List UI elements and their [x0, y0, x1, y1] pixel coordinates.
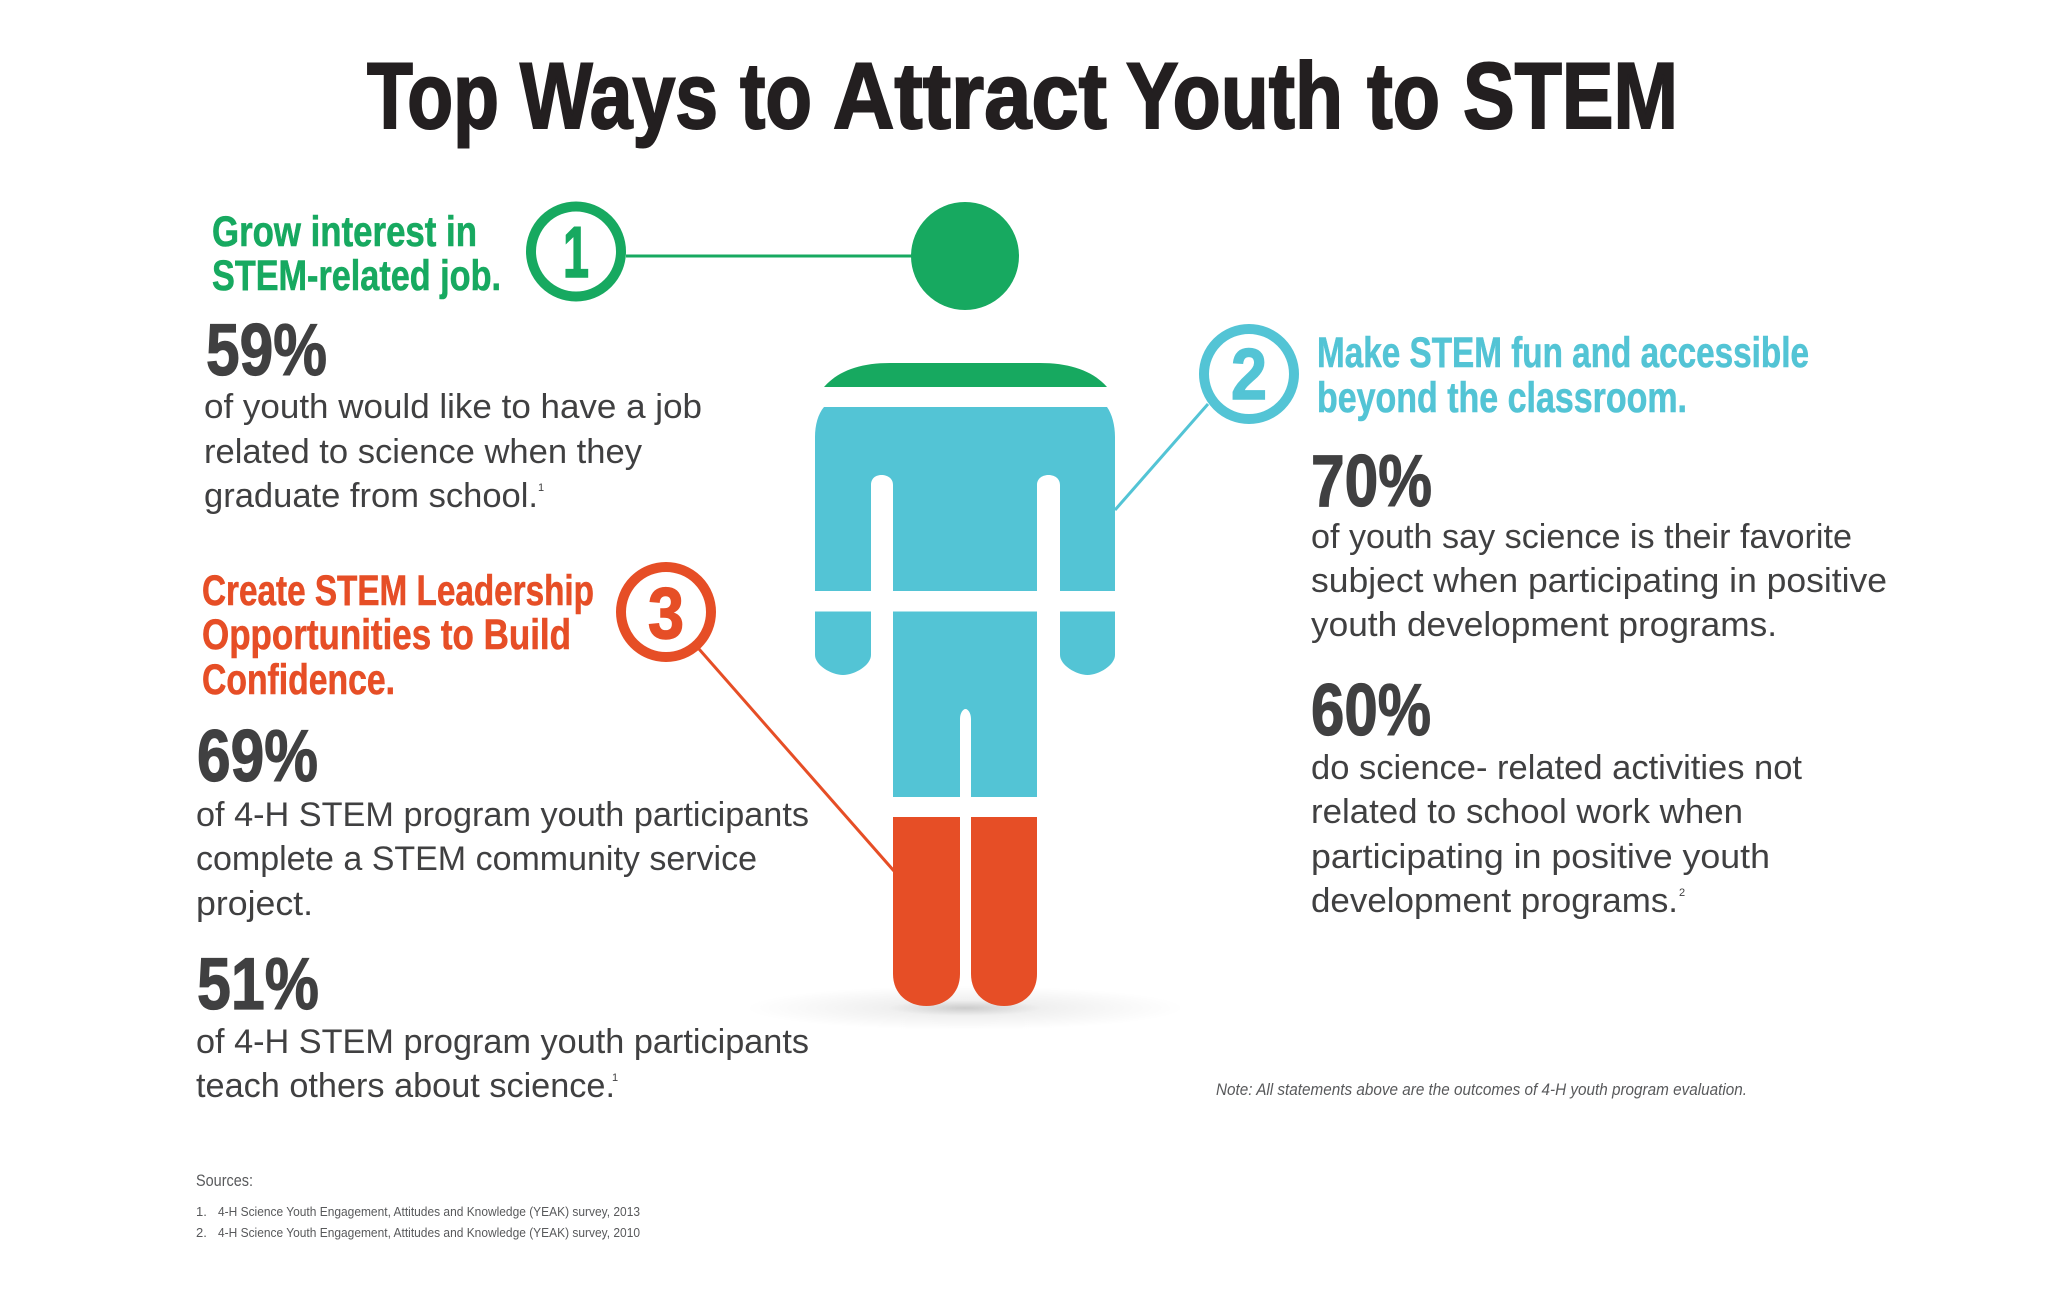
heading: make STEM fun: Make STEM fun and accessible [1317, 329, 1809, 377]
text: 60% description: 2 [1679, 887, 1685, 899]
stat: 69%: 69% [197, 716, 318, 797]
sources: 2. [196, 1225, 207, 1240]
text: 69% description: project. [196, 885, 313, 923]
heading: create leadership: Confidence. [202, 656, 395, 704]
text: 60% description [1311, 749, 1802, 920]
text: 59% description [204, 388, 702, 515]
text: 51% description [196, 1023, 809, 1105]
text: 60% description: related to school work when [1311, 793, 1743, 831]
connector 2 [1115, 404, 1208, 510]
text: 70% description [1311, 518, 1887, 644]
sources: 1. [196, 1204, 207, 1219]
sources: Sources: [196, 1171, 253, 1190]
title: Attract [833, 43, 1107, 148]
title: to [1367, 43, 1440, 148]
title: Ways [520, 43, 718, 148]
heading: create leadership: Create STEM Leadership [202, 567, 594, 615]
text: 59% description: graduate from school. [204, 477, 538, 515]
heading: make STEM fun [1317, 329, 1809, 422]
text: 51% description: 1 [612, 1072, 618, 1084]
stat: 59%: 59% [206, 310, 327, 391]
evaluation note: Note: All statements above are the outcomes of 4-H youth program evaluation. [1216, 1080, 1747, 1099]
figure hips [893, 612, 1037, 797]
badge 2 [1204, 329, 1294, 419]
figure torso and arms [815, 407, 1115, 591]
stat: 60%: 60% [1311, 670, 1431, 751]
text: 60% description: do science- related activities not [1311, 749, 1802, 787]
badge 3 [621, 567, 711, 657]
stat: 70%: 70% [1311, 441, 1432, 522]
text: 59% description: related to science when they [204, 433, 643, 471]
badge 3: 3 [648, 574, 684, 654]
heading: grow interest: STEM-related job. [212, 252, 501, 300]
title: STEM [1463, 43, 1678, 148]
text: 70% description: subject when participating in positive [1311, 562, 1887, 600]
figure right leg [971, 817, 1037, 1006]
sources: 4-H Science Youth Engagement, Attitudes and Knowledge (YEAK) survey, 2010 [218, 1225, 640, 1240]
heading: grow interest [212, 208, 501, 300]
person figure [745, 202, 1185, 1030]
text: 69% description [196, 796, 809, 923]
title [367, 43, 1678, 148]
text: 59% description: 1 [538, 482, 544, 494]
text: 69% description: of 4-H STEM program youth participants [196, 796, 809, 834]
text: 60% description: development programs. [1311, 882, 1678, 920]
text: 69% description: complete a STEM community service [196, 840, 757, 878]
text: 59% description: of youth would like to have a job [204, 388, 702, 426]
badge 2: 2 [1231, 335, 1267, 415]
figure shoulders [824, 363, 1107, 387]
heading: create leadership [202, 567, 594, 704]
badge 1 [531, 206, 621, 296]
text: 51% description: of 4-H STEM program youth participants [196, 1023, 809, 1061]
text: 60% description: participating in positive youth [1311, 838, 1770, 876]
stat: 51%: 51% [197, 944, 319, 1025]
figure right hand [1060, 612, 1115, 675]
title: Top [367, 43, 499, 148]
figure left leg [893, 817, 960, 1006]
connector 1 [626, 254, 912, 258]
heading: grow interest: Grow interest in [212, 208, 477, 256]
text: 70% description: youth development programs. [1311, 606, 1777, 644]
figure head [911, 202, 1019, 310]
connector 3 [699, 649, 894, 871]
sources [196, 1171, 640, 1240]
sources: 4-H Science Youth Engagement, Attitudes and Knowledge (YEAK) survey, 2013 [218, 1204, 640, 1219]
badge 1: 1 [563, 213, 589, 293]
title: Youth [1126, 43, 1343, 148]
title: to [740, 43, 812, 148]
figure shadow [745, 986, 1185, 1030]
figure left hand [815, 612, 871, 675]
text: 70% description: of youth say science is their favorite [1311, 518, 1852, 556]
text: 51% description: teach others about science. [196, 1067, 615, 1105]
heading: create leadership: Opportunities to Build [202, 611, 571, 659]
heading: make STEM fun: beyond the classroom. [1317, 374, 1687, 422]
